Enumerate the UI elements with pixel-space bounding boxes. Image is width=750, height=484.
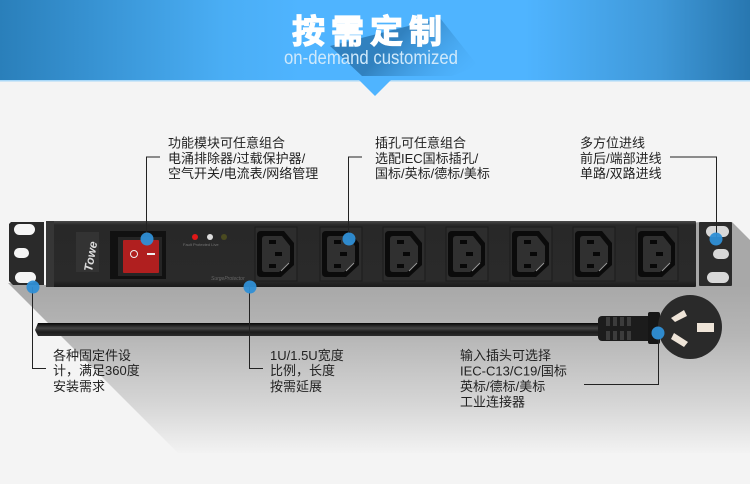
plug body — [598, 316, 656, 341]
right mounting bracket — [699, 222, 732, 286]
callout: fixings — [26, 280, 140, 394]
callout: input plug — [460, 326, 664, 410]
socket 5 — [510, 227, 552, 281]
socket 2 — [320, 227, 362, 281]
socket 6 — [573, 227, 615, 281]
indicator lights: SurgeProtector — [211, 276, 245, 282]
indicator lights — [183, 234, 245, 282]
pointer triangle — [359, 80, 391, 96]
callout: sockets: 国标/英标/德标/美标 — [375, 166, 490, 181]
callout: function modules: 功能模块可任意组合 — [168, 136, 285, 150]
callout: width and length: 1U/1.5U宽度 — [270, 348, 344, 363]
background shadow — [8, 222, 750, 453]
rocker switch — [110, 231, 166, 279]
callout: width and length: 比例，长度 — [270, 363, 335, 378]
callout: input plug: IEC-C13/C19/国标 — [460, 364, 567, 378]
socket 4 — [446, 227, 488, 281]
callout: cable entry — [580, 136, 722, 246]
callout: fixings: 安装需求 — [53, 379, 105, 394]
brand badge: Towe — [81, 240, 100, 273]
brand badge — [76, 232, 100, 273]
callout: cable entry: 前后/端部进线 — [580, 151, 662, 166]
title long shadow — [330, 18, 478, 76]
callout: function modules: 空气开关/电流表/网络管理 — [168, 166, 318, 181]
callout: input plug: 输入插头可选择 — [460, 348, 551, 363]
plug head — [658, 295, 722, 359]
callout: function modules: 电涌排除器/过载保护器/ — [168, 151, 306, 166]
title: 按需定制 — [292, 13, 448, 50]
subtitle: on-demand customized — [284, 48, 458, 69]
socket 1 — [255, 227, 297, 281]
callout: width and length: 按需延展 — [270, 379, 322, 394]
callout: cable entry: 多方位进线 — [580, 136, 645, 150]
cord — [35, 323, 600, 336]
PDU body — [46, 221, 696, 287]
callout: fixings: 计，满足360度 — [53, 363, 140, 378]
indicator lights: Fault Protected Live — [183, 242, 219, 247]
header banner — [0, 0, 750, 96]
callout: function modules — [140, 136, 318, 246]
callout: cable entry: 单路/双路进线 — [580, 166, 662, 181]
callout: input plug: 英标/德标/美标 — [460, 379, 545, 394]
socket 3 — [383, 227, 425, 281]
left mounting bracket — [9, 222, 44, 285]
socket 7 — [636, 227, 678, 281]
callout: fixings: 各种固定件设 — [53, 348, 131, 363]
callout: sockets: 插孔可任意组合 — [375, 136, 466, 150]
callout: width and length — [244, 280, 344, 394]
callout: input plug: 工业连接器 — [460, 394, 525, 410]
callout: sockets: 选配IEC国标插孔/ — [375, 151, 479, 166]
power cord and plug — [35, 295, 722, 359]
callout: sockets — [342, 136, 490, 246]
